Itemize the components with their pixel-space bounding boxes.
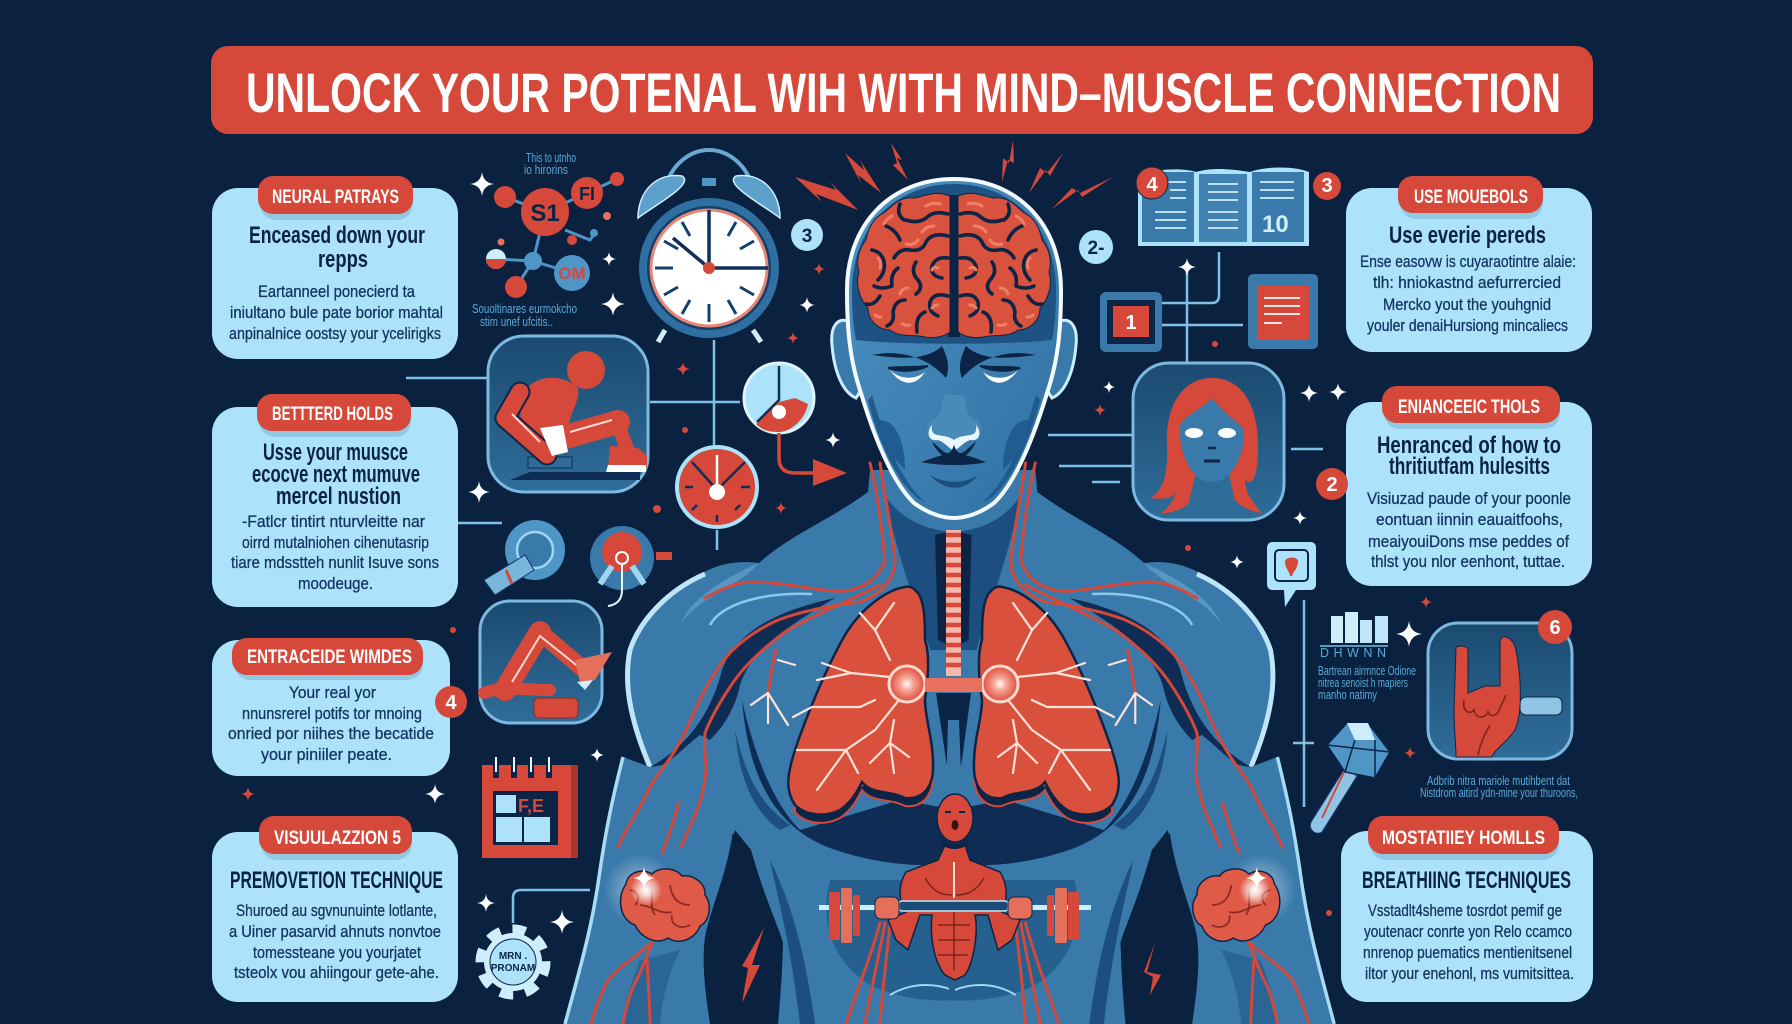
red clock (677, 447, 757, 527)
heading (249, 222, 425, 273)
heading: Use everie pereds (1389, 222, 1546, 249)
heading: mercel nustion (276, 483, 401, 510)
lifter head (937, 794, 973, 849)
molecule captions (472, 151, 577, 329)
molecule captions: io hirorins (524, 163, 568, 177)
lungs and trachea (788, 530, 1119, 823)
body text: -Fatlcr tintirt nturvleitte nar (242, 512, 425, 531)
trachea (946, 530, 961, 676)
bronchus connector (925, 678, 982, 692)
body text: nnunsrerel potifs tor mnoing (242, 704, 422, 723)
left lung (788, 587, 933, 823)
sparkles (425, 172, 1422, 934)
left panel 1: neural pathways (212, 176, 458, 359)
right panel 1: use tools (1346, 176, 1592, 352)
body text: a Uiner pasarvid ahnuts nonvtoe (229, 922, 441, 941)
body text: iniultano bule pate borior mahtal (230, 303, 443, 322)
pill label: USE MOUEBOLS (1414, 187, 1528, 208)
body text: oirrd mutalniohen cihenutasrip (242, 533, 429, 552)
hand caption: Adbrib nitra mariole mutihbent dat (1427, 774, 1570, 788)
heading (1377, 432, 1561, 480)
red arrow (779, 433, 847, 486)
barbell (819, 888, 1091, 943)
lightning bolts around head (742, 140, 1161, 1003)
left panel 4: visualization (212, 816, 458, 1002)
right panel 3: breathing techniques (1341, 816, 1593, 1002)
small pie clock (744, 363, 814, 433)
red sparkles and dots (241, 263, 1432, 916)
body text: iltor your enehonl, ms vumitsittea. (1365, 964, 1574, 983)
pill label (232, 638, 423, 680)
body text: anpinalnice oostsy your ycelirigks (229, 324, 441, 343)
mini bar chart: D H W N N (1320, 646, 1386, 660)
body text: Shuroed au sgvnunuinte lotlante, (236, 901, 437, 920)
body text: youler denaiHursiong mincaliecs (1367, 316, 1568, 335)
body text (1363, 901, 1574, 983)
heading (252, 439, 420, 510)
badge 6: 6 (1549, 617, 1561, 639)
ears (832, 320, 860, 398)
body text: Mercko yout the youhgnid (1383, 295, 1551, 314)
hammer icon (1310, 723, 1390, 833)
body text (229, 901, 441, 982)
heading: thritiutfam hulesitts (1389, 453, 1550, 480)
body text: Your real yor (289, 683, 376, 702)
central figure: torso and arms (565, 463, 1334, 1024)
exercise panel: woman face (1133, 363, 1284, 520)
badge 2: 2 (1326, 474, 1338, 496)
badge 3 on book (1313, 172, 1341, 200)
pill label (1398, 176, 1543, 219)
body text: tomessteane you yourjatet (253, 943, 421, 962)
molecule diagram: S1 (530, 200, 560, 227)
pill label (1368, 816, 1559, 860)
body text: Visiuzad paude of your poonle (1367, 489, 1571, 508)
title banner (211, 46, 1593, 134)
head with brain (832, 179, 1076, 518)
numbered box 1 (1100, 292, 1162, 352)
heading: Henranced of how to (1377, 432, 1561, 459)
number badge 2- (1079, 230, 1113, 264)
body text: Vsstadlt4sheme tosrdot pemif ge (1368, 901, 1562, 920)
alarm clock (638, 150, 780, 342)
exercise panel: seated man (488, 336, 648, 492)
badge 4: 4 (445, 692, 457, 714)
heading: repps (318, 246, 368, 273)
pill label (259, 816, 412, 860)
pill label: ENTRACEIDE WIMDES (247, 647, 412, 668)
body text (229, 282, 443, 343)
hair (1150, 378, 1262, 514)
molecule diagram (486, 172, 624, 298)
body text (1367, 489, 1571, 571)
gear with label: MRN . (499, 951, 527, 962)
body text: Ense easovw is cuyaraotintre alaie: (1360, 252, 1576, 271)
body text: youtenacr conrte yon Relo ccamco (1364, 922, 1572, 941)
calendar icon: F,E (518, 796, 544, 816)
face (1180, 398, 1244, 482)
pill label: VISUULAZZION 5 (274, 828, 401, 849)
body text: moodeuge. (298, 574, 373, 593)
torso mirrored right half (949, 463, 1334, 1024)
number badge 2-: 2- (1088, 238, 1104, 259)
mini bar chart (1320, 612, 1388, 660)
badge 4 (435, 686, 467, 718)
connector lines (406, 252, 1323, 940)
molecule diagram: FI (579, 184, 595, 204)
body text: eontuan iinnin eauaitfoohs, (1376, 510, 1563, 529)
gear with label (481, 930, 545, 994)
pill label: ENIANCEEIC THOLS (1398, 397, 1540, 418)
body text: meaiyouiDons mse peddes of (1368, 532, 1569, 551)
pill label: MOSTATIIEY HOMLLS (1382, 828, 1545, 849)
body text (231, 512, 439, 593)
chart caption: manho natimy (1318, 688, 1378, 702)
body text: your piniiler peate. (261, 745, 392, 764)
calendar icon (482, 757, 578, 858)
machine icon right (590, 526, 654, 606)
pill label (257, 394, 411, 437)
exercise panel: legs (480, 601, 612, 723)
right panel 2: enhanced tools (1346, 386, 1592, 586)
heading: ecocve next mumuve (252, 461, 420, 488)
badge 2 (1316, 468, 1348, 500)
body text: Eartanneel ponecierd ta (258, 282, 415, 301)
pill label (258, 176, 413, 220)
bar grip (899, 901, 1008, 911)
badge 6 (1538, 610, 1572, 644)
torso left half (565, 463, 958, 1024)
document box (1248, 274, 1318, 349)
chart caption: nitrea senoist h mapiers (1318, 676, 1408, 690)
open book (1138, 168, 1309, 246)
chart caption (1318, 664, 1416, 702)
body text: onried por niihes the becatide (228, 724, 434, 743)
molecule diagram: OM (558, 264, 586, 283)
pill label (1382, 386, 1560, 429)
brain (858, 193, 1050, 338)
molecule captions: This to utnho (526, 151, 576, 165)
hand caption: Nistdrom aitird ydn-mine your thuroons, (1420, 786, 1578, 800)
body text: tlh: hniokastnd aefurrercied (1373, 273, 1561, 292)
seated figure (505, 351, 647, 472)
body text: tsteolx vou ahiingour gete-ahe. (234, 963, 439, 982)
chart caption: Bartrean airmnce Odione (1318, 664, 1416, 678)
body text: tiare mdsstteh nunlit Isuve sons (231, 553, 439, 572)
numbered box 1: 1 (1125, 312, 1137, 334)
body text: thlst you nlor eenhont, tuttae. (1371, 552, 1565, 571)
left panel 3: entraceide wimdes (212, 638, 450, 776)
badge 4 on book (1136, 167, 1168, 199)
heading: BREATHIING TECHNIQUES (1362, 867, 1571, 894)
number badge 3: 3 (802, 226, 812, 247)
mini weightlifter with barbell (819, 794, 1091, 980)
heading: PREMOVETION TECHNIQUE (230, 867, 443, 894)
right lung (974, 587, 1119, 823)
exercise panel: hand (1428, 623, 1572, 759)
pill label: BETTTERD HOLDS (272, 404, 393, 425)
hand caption (1420, 774, 1578, 800)
molecule captions: stim unef ufcitis.. (480, 315, 553, 329)
body text: nnrenop puematics mentienitsenel (1363, 943, 1572, 962)
heading: Usse your muusce (263, 439, 408, 466)
neck (1185, 468, 1238, 518)
lifter body (888, 845, 1020, 980)
muscle burst (604, 854, 709, 941)
badge 3 on book: 3 (1321, 175, 1333, 197)
molecule captions: Souoltinares eurmokcho (472, 302, 577, 316)
pill label: NEURAL PATRAYS (272, 187, 399, 208)
body text (228, 683, 434, 764)
number badge 3 (791, 219, 823, 251)
heading: Enceased down your (249, 222, 425, 249)
open book: 10 (1262, 211, 1289, 238)
machine icon left (484, 520, 565, 595)
speech bubble icon (1267, 542, 1316, 607)
body text (1360, 252, 1576, 335)
face features (872, 346, 1036, 488)
gear with label: PRONAM (491, 963, 535, 974)
left panel 2: bettered holds (212, 394, 458, 607)
head shape (847, 179, 1061, 518)
badge 4 on book: 4 (1146, 174, 1158, 196)
